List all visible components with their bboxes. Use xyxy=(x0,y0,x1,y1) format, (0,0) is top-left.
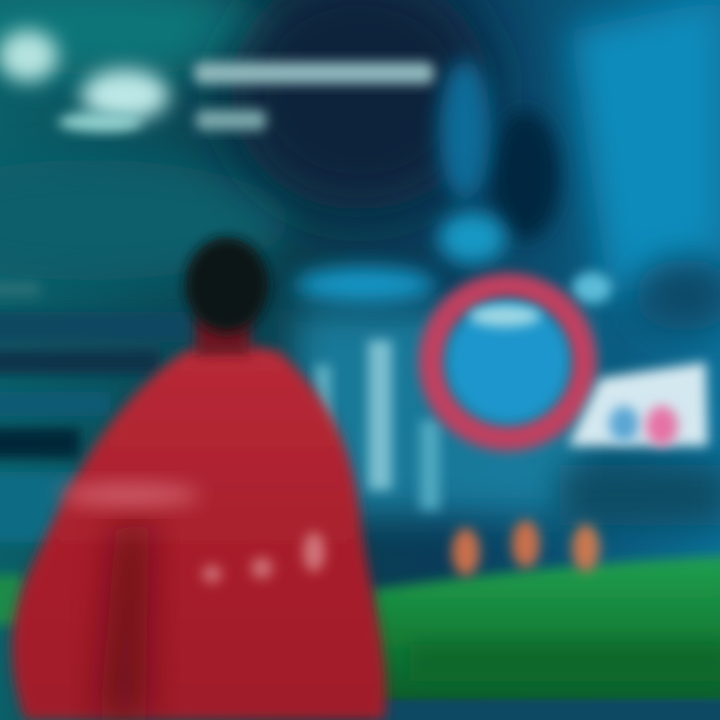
head xyxy=(185,237,269,333)
jacket highlight xyxy=(60,483,200,507)
distant players in red xyxy=(452,520,600,576)
neck xyxy=(196,315,250,355)
stands: dark horizontal bands at left xyxy=(0,282,190,542)
stadium lights: blue glow and pillars xyxy=(295,267,720,525)
emblem: red ring with blue centre xyxy=(432,286,584,438)
person: back view in red jacket xyxy=(12,237,386,720)
jacket xyxy=(12,346,386,720)
jacket markings xyxy=(202,532,325,583)
pitch xyxy=(0,556,720,720)
sign: white board with blue and pink marks xyxy=(568,362,708,446)
clouds and headline block xyxy=(0,30,434,132)
jacket shadow fold xyxy=(100,520,150,720)
